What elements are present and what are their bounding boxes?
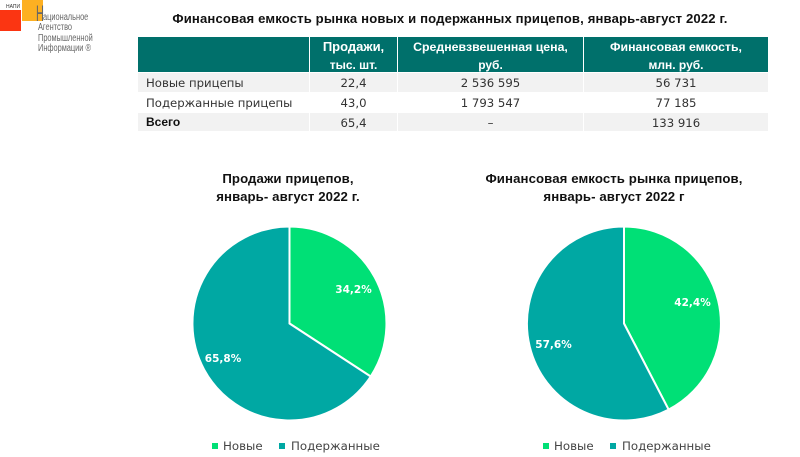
row: всего: – bbox=[488, 116, 493, 130]
legend: продажи bbox=[212, 439, 380, 453]
legend: финансовая емкость: Новые bbox=[554, 439, 594, 453]
logo: НАПИ: ациональное bbox=[43, 12, 88, 23]
logo: НАПИ: Н bbox=[36, 1, 44, 26]
row: подержанные прицепы: Подержанные прицепы bbox=[146, 96, 292, 110]
row: подержанные прицепы: 43,0 bbox=[340, 96, 367, 110]
table header: Финансовая емкость, bbox=[610, 40, 742, 54]
table header: млн. руб. bbox=[648, 58, 704, 72]
table header: тыс. шт. bbox=[330, 58, 377, 72]
legend: финансовая емкость: Подержанные bbox=[622, 439, 711, 453]
logo: НАПИ: Агентство bbox=[38, 22, 72, 33]
pie chart: продажи: 65,8% bbox=[205, 353, 242, 365]
pie chart: продажи: 34,2% bbox=[335, 284, 372, 296]
row: новые прицепы bbox=[138, 73, 768, 92]
logo: НАПИ: Промышленной bbox=[38, 32, 93, 44]
logo: НАПИ bbox=[0, 0, 93, 54]
legend: продажи: Подержанные bbox=[291, 439, 380, 453]
row: всего bbox=[138, 113, 768, 131]
heading: продажи прицепов bbox=[216, 171, 360, 204]
row: подержанные прицепы: 77 185 bbox=[656, 96, 696, 110]
row: всего: 65,4 bbox=[340, 116, 367, 130]
table bbox=[138, 37, 768, 131]
logo: НАПИ: Информации ® bbox=[38, 43, 91, 54]
heading: финансовая емкость рынка: январь- август 2022 г bbox=[543, 189, 685, 204]
table header bbox=[138, 37, 768, 72]
pie chart: финансовая емкость: 57,6% bbox=[535, 339, 572, 351]
logo: НАПИ: НАПИ bbox=[6, 4, 20, 10]
row: всего: Всего bbox=[146, 115, 180, 129]
table header: руб. bbox=[478, 58, 503, 72]
row: новые прицепы: 56 731 bbox=[656, 76, 696, 90]
heading: продажи прицепов: январь- август 2022 г. bbox=[216, 189, 360, 204]
table header: Продажи, bbox=[323, 39, 384, 54]
heading: продажи прицепов: Продажи прицепов, bbox=[222, 171, 354, 186]
pie chart: финансовая емкость: 42,4% bbox=[674, 297, 711, 309]
heading: финансовая емкость рынка: Финансовая емкость рынка прицепов, bbox=[485, 171, 743, 186]
heading: финансовая емкость рынка bbox=[485, 171, 743, 204]
row: новые прицепы: 2 536 595 bbox=[461, 76, 520, 90]
table header: Средневзвешенная цена, bbox=[413, 40, 568, 54]
pie chart: продажи bbox=[193, 228, 386, 420]
title: Финансовая емкость рынка новых и подержанных прицепов, январь-август 2022 г. bbox=[172, 11, 728, 26]
row: подержанные прицепы: 1 793 547 bbox=[461, 96, 520, 110]
row: подержанные прицепы bbox=[146, 96, 696, 110]
row: всего: 133 916 bbox=[652, 116, 700, 130]
row: новые прицепы: 22,4 bbox=[340, 76, 367, 90]
legend: финансовая емкость bbox=[543, 439, 711, 453]
legend: продажи: Новые bbox=[223, 439, 263, 453]
row: новые прицепы: Новые прицепы bbox=[146, 76, 244, 90]
pie chart: финансовая емкость bbox=[528, 228, 720, 420]
